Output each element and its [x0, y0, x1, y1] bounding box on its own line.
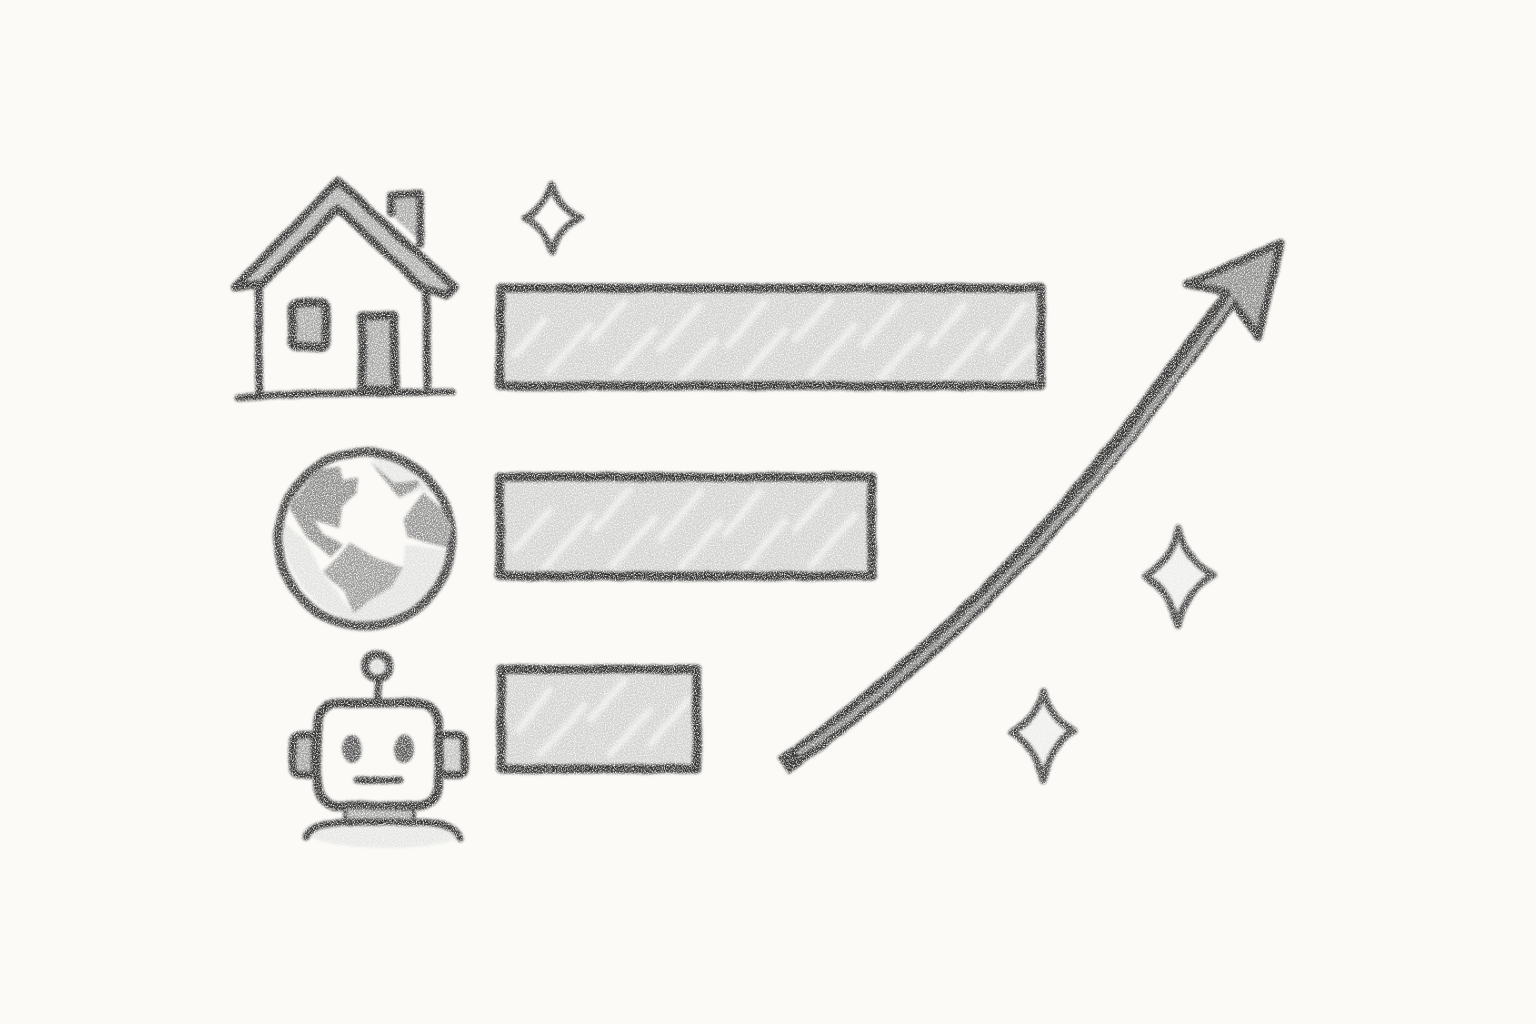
sketch artwork: [233, 180, 1281, 848]
bar: globe: [500, 477, 872, 576]
bar: house: [500, 288, 1041, 386]
icon: robot: [293, 654, 464, 848]
bar: robot: [501, 669, 697, 769]
star: top left: [525, 184, 581, 252]
star: bottom: [1012, 691, 1074, 780]
icon: globe: [278, 452, 452, 626]
icon: house: [233, 180, 457, 398]
star: right: [1146, 528, 1214, 625]
arrow: rising trend: [783, 243, 1281, 766]
